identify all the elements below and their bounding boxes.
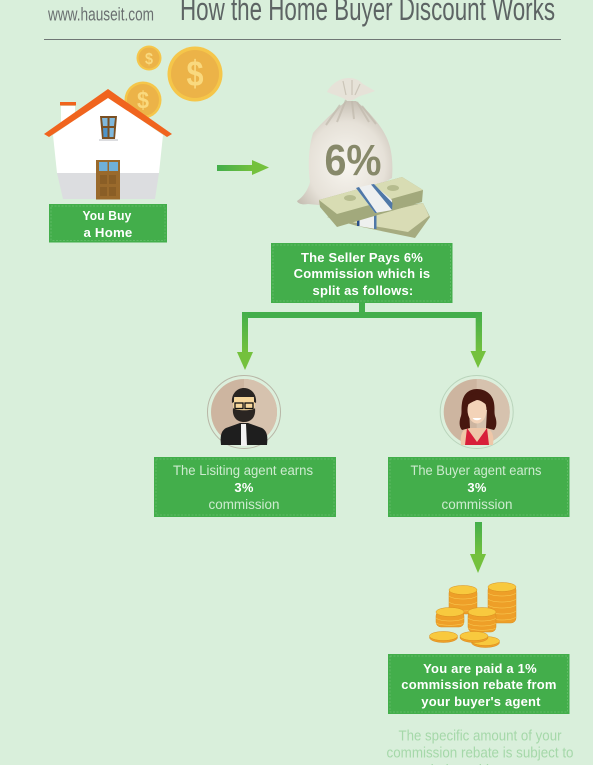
icon: money bag 6% (297, 78, 392, 207)
footnote: The specific amount of your (398, 728, 562, 744)
label: 1% rebate (388, 654, 570, 714)
label: 1% rebate: commission rebate from (401, 677, 557, 692)
label: you buy a home: a Home (84, 225, 132, 240)
icon: falling coins (124, 46, 222, 118)
icon: falling coins: $ (137, 87, 150, 114)
icon: listing agent avatar (208, 376, 280, 448)
label: listing agent: The Lisiting agent earns (173, 463, 313, 478)
site url: www.hauseit.com (47, 4, 154, 24)
label: 1% rebate: You are paid a 1% (423, 661, 537, 676)
footnote: commission rebate is subject to (386, 746, 574, 762)
label: 1% rebate: your buyer's agent (421, 694, 541, 709)
label: buyer agent: 3% (467, 480, 487, 495)
label: seller pays 6% (271, 243, 452, 303)
icon: falling coins: $ (186, 53, 204, 94)
footnote (386, 728, 574, 765)
label: listing agent: 3% (234, 480, 254, 495)
icon: buyer agent avatar (440, 376, 513, 448)
icon: house (44, 89, 172, 200)
icon: falling coins: $ (145, 51, 153, 68)
label: buyer agent: commission (442, 497, 512, 512)
label: seller pays 6%: The Seller Pays 6% (301, 250, 423, 265)
icon: gold coin stacks (430, 582, 516, 648)
arrow: buyer agent to coins (470, 522, 486, 573)
label: you buy a home (49, 204, 167, 242)
icon: money bag 6%: 6% (324, 136, 382, 185)
label: buyer agent (388, 457, 570, 517)
label: listing agent (154, 457, 336, 517)
icon: cash stacks (319, 177, 430, 238)
arrow: house to money bag (217, 160, 269, 175)
label: seller pays 6%: split as follows: (313, 283, 413, 298)
label: buyer agent: The Buyer agent earns (410, 463, 542, 478)
arrows: commission split (237, 303, 486, 370)
label: you buy a home: You Buy (82, 208, 132, 223)
label: seller pays 6%: Commission which is (294, 266, 430, 281)
label: listing agent: commission (208, 497, 280, 512)
